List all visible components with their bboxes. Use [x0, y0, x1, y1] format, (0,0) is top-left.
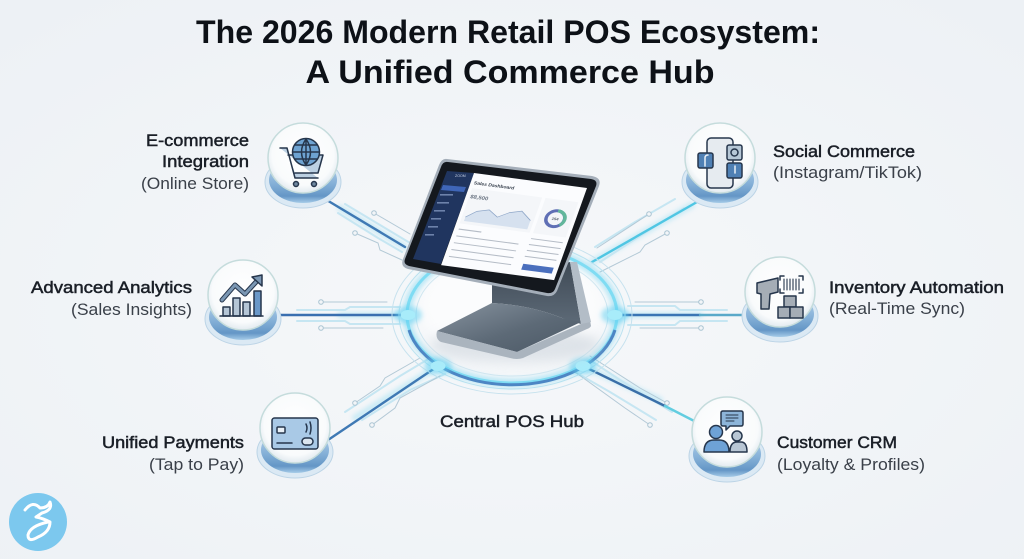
title: The 2026 Modern Retail POS Ecosystem: — [196, 14, 820, 50]
label: inventory automation — [829, 278, 1004, 318]
connector circuit lines — [272, 199, 752, 440]
title — [196, 14, 820, 90]
title: A Unified Commerce Hub — [306, 54, 714, 90]
screen dashboard: $8,500 — [469, 195, 489, 202]
label: inventory automation: (Real-Time Sync) — [829, 299, 965, 318]
label: e-commerce integration: E-commerce — [146, 131, 249, 150]
label: unified payments: Unified Payments — [102, 433, 244, 452]
label: advanced analytics — [31, 278, 192, 319]
icon: phone with social apps — [698, 138, 742, 188]
label: unified payments — [102, 433, 244, 474]
node: advanced analytics — [205, 260, 281, 345]
label: e-commerce integration: (Online Store) — [141, 174, 249, 193]
label: customer CRM — [777, 433, 925, 474]
label: customer CRM: Customer CRM — [777, 433, 897, 452]
icon: barcode scanner and boxes — [757, 276, 803, 318]
central hub ring — [392, 236, 632, 394]
label: social commerce: (Instagram/TikTok) — [773, 163, 922, 182]
label: unified payments: (Tap to Pay) — [149, 455, 244, 474]
screen dashboard: 154 — [551, 216, 560, 222]
label: customer CRM: (Loyalty & Profiles) — [777, 455, 925, 474]
label: advanced analytics: (Sales Insights) — [71, 300, 192, 319]
label: advanced analytics: Advanced Analytics — [31, 278, 192, 297]
node: customer CRM — [689, 397, 765, 482]
POS terminal — [402, 159, 600, 363]
node: unified payments — [257, 393, 333, 478]
stand base — [437, 303, 581, 352]
node: inventory automation — [742, 257, 818, 342]
icon: customers and speech bubble — [704, 411, 747, 452]
stand shadow — [430, 327, 600, 363]
label: inventory automation: Inventory Automation — [829, 278, 1004, 297]
screen dashboard — [441, 173, 587, 280]
node: e-commerce — [265, 123, 341, 208]
donut chart — [543, 210, 567, 228]
label: social commerce — [773, 142, 922, 182]
tablet frame — [402, 159, 600, 296]
icon: shopping cart and globe — [280, 138, 323, 186]
stand neck — [492, 262, 581, 324]
sales chart — [464, 204, 533, 229]
label: e-commerce integration: Integration — [162, 152, 249, 171]
logo badge — [9, 493, 67, 551]
screen dashboard: Sales Dashboard — [473, 181, 515, 191]
label: social commerce: Social Commerce — [773, 142, 915, 161]
node: social commerce — [682, 123, 758, 208]
icon: growth bar chart — [220, 275, 263, 316]
icon: payment card — [272, 418, 318, 449]
label: e-commerce integration — [141, 131, 249, 193]
label: central POS hub: Central POS Hub — [440, 412, 584, 431]
POS terminal: ZOOM — [455, 174, 466, 178]
screen sidebar — [413, 171, 474, 264]
